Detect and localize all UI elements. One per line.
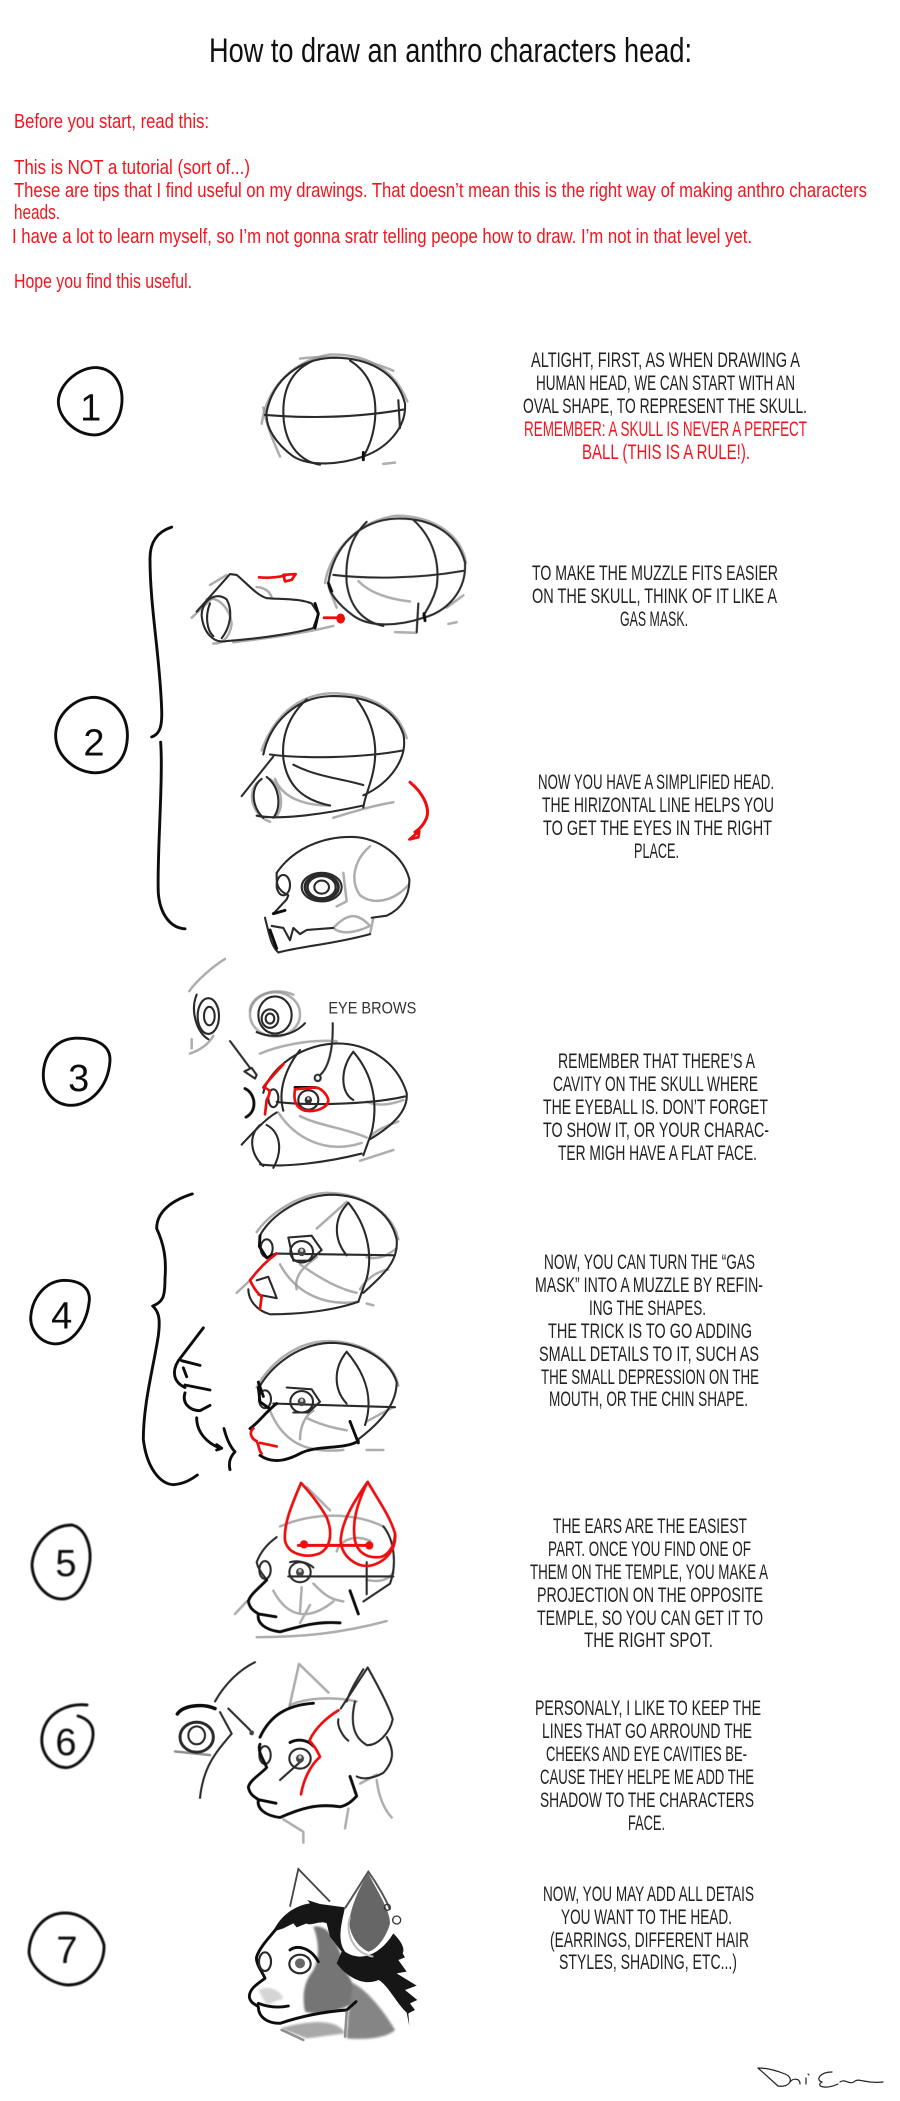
muzzle refining head B — [250, 1341, 398, 1461]
eyebrows label: EYE BROWS — [328, 999, 416, 1018]
brace for step 4 — [143, 1194, 197, 1485]
step 5 caption: THE RIGHT SPOT. — [584, 1629, 713, 1652]
step 1 caption: BALL (THIS IS A RULE!). — [582, 441, 750, 464]
intro note in red: Hope you find this useful. — [14, 271, 192, 293]
step 1 and step 2 drawings — [56, 354, 466, 952]
step 7 caption: NOW, YOU MAY ADD ALL DETAIS — [543, 1883, 754, 1906]
head with eye cavity — [242, 1041, 407, 1168]
head with ears sketch — [235, 1487, 394, 1637]
step 7 caption: STYLES, SHADING, ETC...) — [559, 1951, 737, 1974]
step 2 caption: gas mask: ON THE SKULL, THINK OF IT LIKE A — [532, 585, 777, 608]
step 2 caption: simplified head: THE HIRIZONTAL LINE HELPS YOU — [542, 794, 774, 817]
hair — [273, 1900, 417, 2026]
step 4 caption: ING THE SHAPES. — [589, 1297, 706, 1320]
eye close-up sketches — [189, 959, 305, 1054]
step 4 caption: THE TRICK IS TO GO ADDING — [548, 1320, 752, 1343]
step 2 caption: gas mask: TO MAKE THE MUZZLE FITS EASIER — [532, 562, 778, 585]
step 3 caption — [543, 1050, 769, 1165]
step 2 caption: simplified head: PLACE. — [634, 840, 679, 863]
step 7 caption — [543, 1883, 754, 1974]
intro note in red — [12, 111, 867, 293]
step 4 caption: MOUTH, OR THE CHIN SHAPE. — [549, 1388, 748, 1411]
step 5 caption: PROJECTION ON THE OPPOSITE — [537, 1584, 763, 1607]
skull drawing — [265, 837, 409, 952]
step 7 number: 7 — [56, 1930, 78, 1972]
finished head step 7 — [249, 1869, 417, 2040]
step 5 caption: THE EARS ARE THE EASIEST — [553, 1515, 747, 1538]
step 6 caption: SHADOW TO THE CHARACTERS — [540, 1789, 754, 1812]
step 7 number — [29, 1913, 104, 1985]
ear — [345, 1872, 390, 1957]
step 6 caption: FACE. — [628, 1812, 665, 1835]
step 3 caption: TER MIGH HAVE A FLAT FACE. — [558, 1142, 757, 1165]
step 5 caption: THEM ON THE TEMPLE, YOU MAKE A — [530, 1561, 768, 1584]
red nose line A — [250, 1254, 277, 1309]
face lines — [249, 1928, 356, 2040]
step 6 caption: CHEEKS AND EYE CAVITIES BE- — [546, 1743, 747, 1766]
step 6 number — [42, 1705, 93, 1768]
step 4 caption: THE SMALL DEPRESSION ON THE — [541, 1366, 759, 1389]
step 5 number: 5 — [55, 1543, 77, 1585]
step 2 caption: gas mask: GAS MASK. — [620, 608, 688, 631]
step 6 caption: PERSONALY, I LIKE TO KEEP THE — [535, 1697, 761, 1720]
signature — [758, 2068, 883, 2087]
step number 3 — [43, 1038, 110, 1105]
step 7 caption: YOU WANT TO THE HEAD. — [561, 1906, 732, 1929]
skull with muzzle target — [325, 516, 466, 633]
step 3 caption: REMEMBER THAT THERE’S A — [558, 1050, 755, 1073]
red eye cavity marks — [263, 1064, 328, 1114]
shading — [258, 1926, 395, 2039]
title: How to draw an anthro characters head: — [209, 32, 692, 70]
step 6 caption: LINES THAT GO ARROUND THE — [542, 1720, 752, 1743]
step 6 caption: CAUSE THEY HELPE ME ADD THE — [540, 1766, 754, 1789]
step 6 caption — [535, 1697, 761, 1835]
red ear projection guides — [285, 1482, 395, 1566]
step 5 caption — [530, 1515, 768, 1652]
step 4 caption — [535, 1251, 763, 1411]
step 5 caption: PART. ONCE YOU FIND ONE OF — [548, 1538, 751, 1561]
red arrows: muzzle to skull — [259, 574, 344, 622]
intro note in red: heads. — [14, 202, 60, 224]
step number 2: 2 — [83, 723, 105, 765]
step 2 caption: simplified head — [538, 771, 774, 863]
muzzle refining head A — [237, 1193, 398, 1314]
gas mask muzzle sketch — [192, 574, 333, 644]
step number 3: 3 — [68, 1058, 89, 1100]
oval skull sketch — [262, 354, 407, 465]
step 5 and step 6 drawings — [175, 1482, 395, 1842]
step 4 caption: NOW, YOU CAN TURN THE “GAS — [544, 1251, 755, 1274]
red curved arrow — [409, 782, 428, 839]
pointer arrow from eye close-up — [230, 1041, 257, 1117]
step 5 caption: TEMPLE, SO YOU CAN GET IT TO — [537, 1607, 763, 1630]
intro note in red: This is NOT a tutorial (sort of...) — [14, 157, 250, 179]
head with cheek lines — [248, 1664, 393, 1842]
eye close-up step 6 — [175, 1662, 255, 1798]
brace for step 2 — [150, 527, 185, 929]
intro note in red: Before you start, read this: — [14, 111, 209, 133]
red mouth line B — [251, 1429, 277, 1454]
step 5 number — [32, 1525, 90, 1599]
simplified head sketch — [242, 693, 407, 822]
earrings — [384, 1904, 401, 1924]
step 2 caption: simplified head: TO GET THE EYES IN THE RIGHT — [543, 817, 772, 840]
step 1 caption — [523, 349, 807, 464]
back ear outline — [290, 1869, 330, 1907]
step number 1: 1 — [80, 388, 101, 430]
step number 1 — [58, 368, 122, 435]
step 4 caption: MASK” INTO A MUZZLE BY REFIN- — [535, 1274, 763, 1297]
mouth detail sketches — [174, 1328, 235, 1470]
intro note in red: I have a lot to learn myself, so I’m not gonna sratr telling peope how to draw. I’m not in that level yet. — [12, 226, 752, 248]
step 6 number: 6 — [55, 1722, 77, 1764]
red cheek lines — [301, 1710, 338, 1794]
step 7 caption: (EARRINGS, DIFFERENT HAIR — [550, 1929, 749, 1952]
step 3 caption: THE EYEBALL IS. DON’T FORGET — [543, 1096, 768, 1119]
step 3 caption: TO SHOW IT, OR YOUR CHARAC- — [543, 1119, 769, 1142]
step 3 and step 4 drawings — [31, 959, 416, 1485]
step number 4: 4 — [51, 1296, 72, 1338]
step 3 caption: CAVITY ON THE SKULL WHERE — [553, 1073, 758, 1096]
step 2 caption: gas mask — [532, 562, 778, 631]
step number 2 — [56, 697, 127, 773]
eyebrows pointer — [315, 1023, 333, 1081]
step 4 caption: SMALL DETAILS TO IT, SUCH AS — [539, 1343, 759, 1366]
step number 4 — [31, 1280, 89, 1344]
